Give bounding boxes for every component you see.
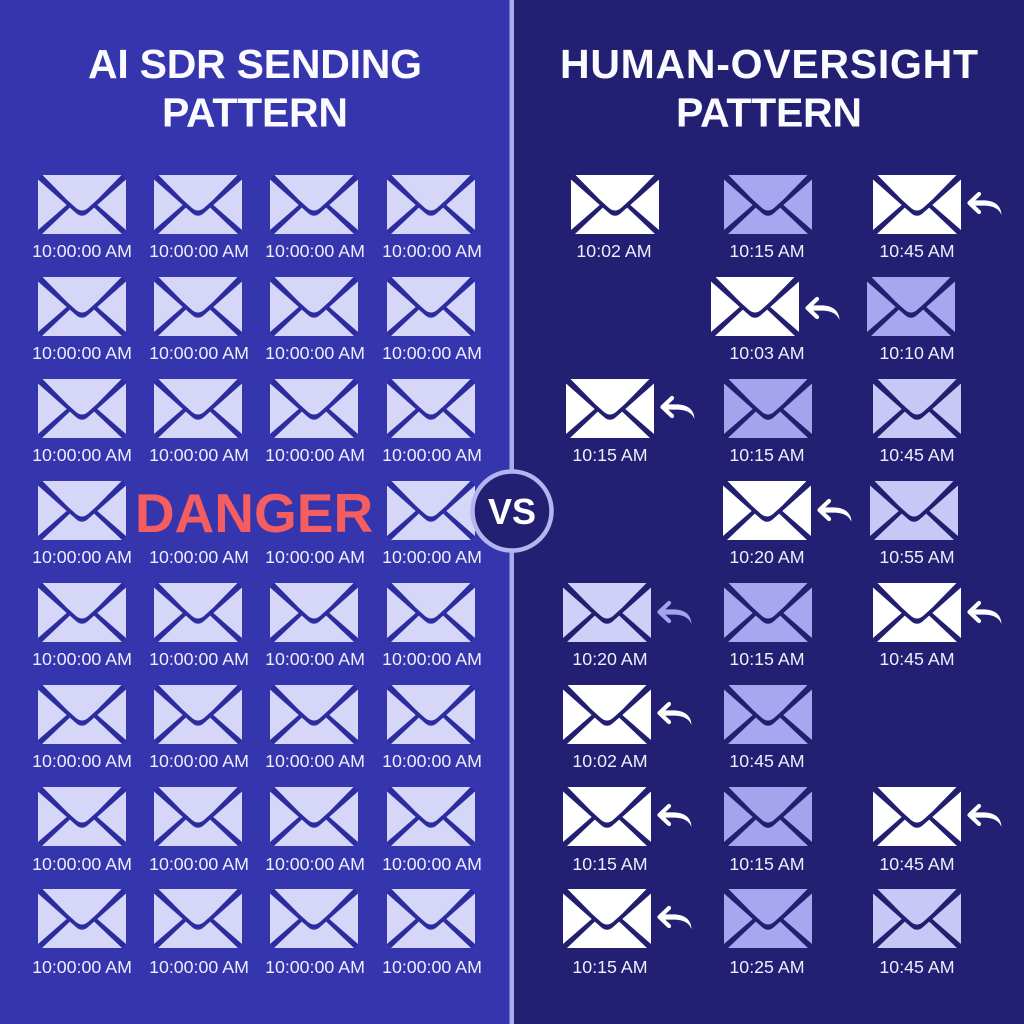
row 4 emails: 10:00:00 AM <box>382 547 482 567</box>
email grid: identical timestamps <box>32 175 482 977</box>
panel: AI SDR sending pattern <box>0 0 511 1024</box>
row 5 emails: 10:00:00 AM <box>149 649 249 669</box>
row 4 emails: 10:00:00 AM <box>149 547 249 567</box>
row 1 emails: 10:00:00 AM <box>265 241 365 261</box>
row 7 emails: 10:00:00 AM <box>265 854 365 874</box>
row 5 emails: 10:45 AM <box>879 649 955 669</box>
row 4 emails: 10:00:00 AM <box>265 547 365 567</box>
heading: human-oversight pattern: HUMAN-OVERSIGHT <box>560 41 978 87</box>
row 8 emails: 10:45 AM <box>879 957 955 977</box>
row 1 emails <box>32 175 482 261</box>
row 8 emails: 10:00:00 AM <box>149 957 249 977</box>
row 7 emails <box>32 787 482 874</box>
row 5 emails: 10:20 AM <box>572 649 648 669</box>
row 3 emails <box>32 379 482 465</box>
VS badge <box>472 472 552 550</box>
row 7 emails: 10:00:00 AM <box>149 854 249 874</box>
row 7 emails: 10:45 AM <box>879 854 955 874</box>
row 2 emails: 10:03 AM <box>729 343 805 363</box>
heading: AI SDR sending pattern: PATTERN <box>162 90 348 136</box>
row 2 emails: 10:00:00 AM <box>382 343 482 363</box>
row 3 emails: 10:00:00 AM <box>149 445 249 465</box>
row 3 emails: 10:15 AM <box>572 445 648 465</box>
row 4 emails <box>32 481 482 567</box>
row 5 emails: 10:00:00 AM <box>265 649 365 669</box>
row 7 emails: 10:15 AM <box>572 854 648 874</box>
row 3 emails: 10:45 AM <box>879 445 955 465</box>
row 3 emails <box>566 379 961 465</box>
danger label: DANGER <box>135 482 373 544</box>
heading: human-oversight pattern <box>560 41 978 136</box>
row 5 emails <box>563 583 1002 669</box>
heading: human-oversight pattern: PATTERN <box>676 90 862 136</box>
row 1 emails: 10:15 AM <box>729 241 805 261</box>
heading: AI SDR sending pattern: AI SDR SENDING <box>88 41 422 87</box>
row 3 emails: 10:00:00 AM <box>32 445 132 465</box>
panel: human-oversight pattern <box>511 0 1024 1024</box>
row 6 emails <box>32 685 482 771</box>
row 8 emails: 10:00:00 AM <box>382 957 482 977</box>
row 4 emails: 10:20 AM <box>729 547 805 567</box>
row 6 emails: 10:00:00 AM <box>32 751 132 771</box>
row 7 emails: 10:00:00 AM <box>32 854 132 874</box>
row 6 emails: 10:00:00 AM <box>265 751 365 771</box>
row 8 emails <box>563 889 961 977</box>
row 6 emails: 10:45 AM <box>729 751 805 771</box>
row 7 emails: 10:00:00 AM <box>382 854 482 874</box>
heading: AI SDR sending pattern <box>88 41 422 136</box>
row 5 emails <box>32 583 482 669</box>
row 7 emails <box>563 787 1002 874</box>
row 2 emails <box>711 277 955 363</box>
row 4 emails: 10:55 AM <box>879 547 955 567</box>
row 8 emails: 10:00:00 AM <box>265 957 365 977</box>
row 1 emails: 10:02 AM <box>576 241 652 261</box>
row 2 emails: 10:00:00 AM <box>32 343 132 363</box>
row 6 emails: 10:00:00 AM <box>149 751 249 771</box>
row 4 emails <box>723 481 958 567</box>
row 8 emails: 10:25 AM <box>729 957 805 977</box>
row 2 emails: 10:10 AM <box>879 343 955 363</box>
row 6 emails: 10:02 AM <box>572 751 648 771</box>
row 5 emails: 10:00:00 AM <box>382 649 482 669</box>
row 1 emails: 10:45 AM <box>879 241 955 261</box>
row 3 emails: 10:00:00 AM <box>382 445 482 465</box>
row 4 emails: 10:00:00 AM <box>32 547 132 567</box>
row 7 emails: 10:15 AM <box>729 854 805 874</box>
row 1 emails: 10:00:00 AM <box>32 241 132 261</box>
row 3 emails: 10:00:00 AM <box>265 445 365 465</box>
row 8 emails: 10:00:00 AM <box>32 957 132 977</box>
VS badge: VS <box>488 491 536 532</box>
row 6 emails: 10:00:00 AM <box>382 751 482 771</box>
row 1 emails: 10:00:00 AM <box>382 241 482 261</box>
row 2 emails: 10:00:00 AM <box>149 343 249 363</box>
row 8 emails <box>32 889 482 977</box>
center divider <box>510 0 514 1024</box>
row 6 emails <box>563 685 812 771</box>
row 3 emails: 10:15 AM <box>729 445 805 465</box>
row 8 emails: 10:15 AM <box>572 957 648 977</box>
row 2 emails: 10:00:00 AM <box>265 343 365 363</box>
row 2 emails <box>32 277 482 363</box>
row 1 emails <box>571 175 1002 261</box>
row 5 emails: 10:00:00 AM <box>32 649 132 669</box>
row 1 emails: 10:00:00 AM <box>149 241 249 261</box>
row 5 emails: 10:15 AM <box>729 649 805 669</box>
